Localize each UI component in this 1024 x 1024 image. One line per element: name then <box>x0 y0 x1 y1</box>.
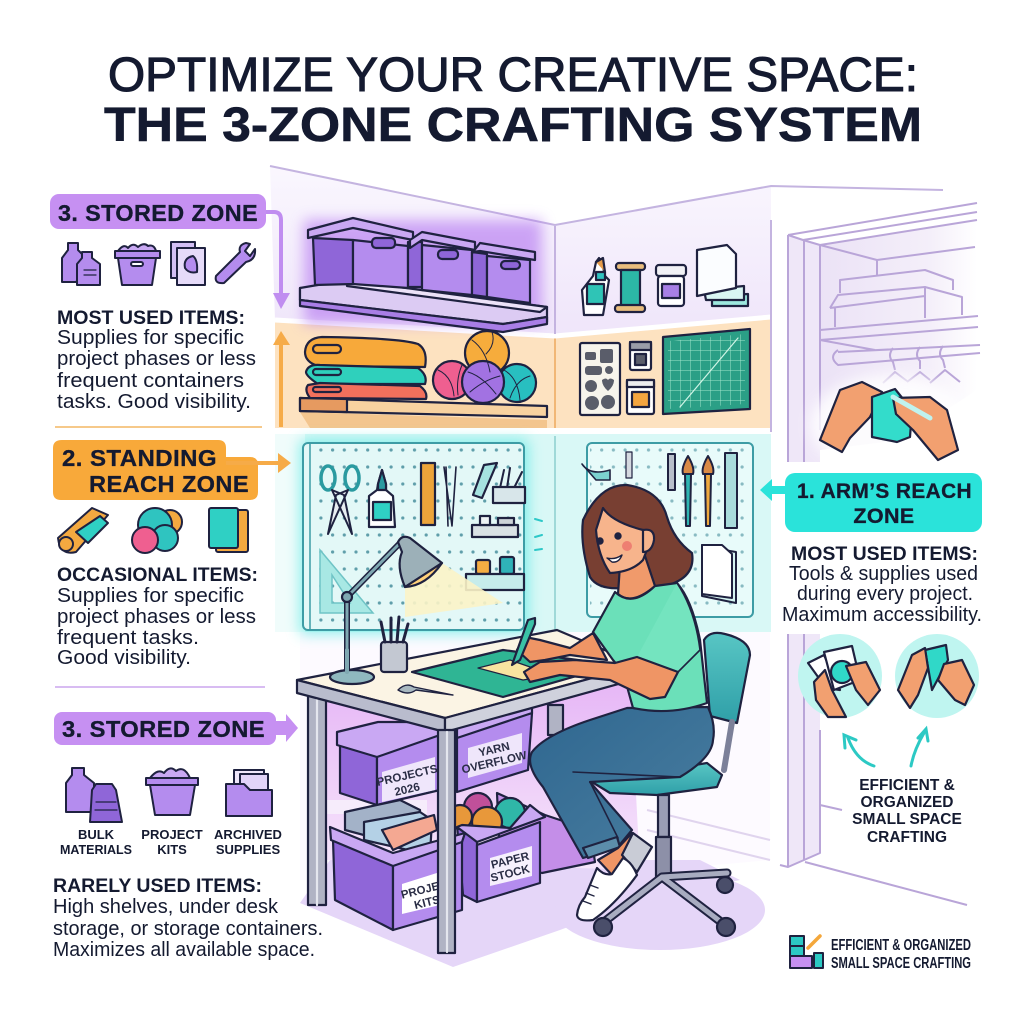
text: efficient and organized <box>852 777 962 846</box>
arrows: up to circles <box>844 729 928 766</box>
text: most used items top <box>57 308 256 413</box>
yarn overflow box <box>457 713 532 792</box>
chair <box>592 633 750 936</box>
text: occasional items: OCCASIONAL ITEMS: <box>57 565 258 586</box>
glue bottle <box>369 470 395 527</box>
closet <box>776 203 990 905</box>
title: OPTIMIZE YOUR CREATIVE SPACE: <box>108 49 918 102</box>
torso <box>593 583 707 711</box>
face <box>596 508 652 573</box>
front shoe <box>577 858 637 920</box>
arrow: to pegboard <box>226 453 291 473</box>
icon captions: MATERIALS <box>60 842 132 857</box>
text: occasional items <box>57 565 258 669</box>
upper wall supplies: glue, thread, jar, paper <box>582 245 748 315</box>
shelf <box>300 280 547 332</box>
text: most used items right <box>782 544 982 626</box>
text: most used items top: Supplies for specific <box>57 327 244 349</box>
under desk storage: OVERFLOW <box>461 750 528 776</box>
icon captions: KITS <box>157 842 187 857</box>
text: most used items top: MOST USED ITEMS: <box>57 308 245 329</box>
text: rarely used items: storage, or storage containers. <box>53 918 323 940</box>
under desk storage: PAPER <box>490 850 531 872</box>
label: 3 stored zone lower: 3. STORED ZONE <box>62 716 265 742</box>
wall panel: stencils and cutting mat <box>580 329 750 415</box>
box 1 <box>308 218 413 288</box>
icons: hands circles <box>798 634 979 718</box>
label: 2 standing reach zone: REACH ZONE <box>89 471 249 497</box>
text: occasional items: Good visibility. <box>57 647 191 669</box>
under desk storage: STOCK <box>489 863 532 885</box>
icon captions: ARCHIVED <box>214 827 282 842</box>
footer logo <box>790 936 971 972</box>
desk lamp <box>330 537 503 684</box>
text: most used items top: tasks. Good visibility. <box>57 391 251 413</box>
label: 2 standing reach zone <box>53 440 258 500</box>
text: efficient and organized: SMALL SPACE <box>852 811 962 828</box>
legs <box>530 707 714 858</box>
dividers <box>55 686 265 688</box>
box 3 <box>472 243 535 303</box>
set square <box>320 550 373 613</box>
under desk storage: PROJE <box>400 880 441 902</box>
room background <box>270 166 943 967</box>
project kits box <box>345 800 420 850</box>
icon: hands with fabric <box>810 375 970 475</box>
text: most used items right: Maximum accessibility. <box>782 604 982 626</box>
band: standing reach zone <box>275 317 771 428</box>
text: occasional items: frequent tasks. <box>57 627 199 649</box>
label: 3 stored zone top <box>50 194 266 229</box>
label: 2 standing reach zone: 2. STANDING <box>62 445 217 471</box>
arrow: to right pegboard <box>760 479 785 501</box>
text: rarely used items: High shelves, under desk <box>53 896 279 918</box>
tools <box>444 463 525 590</box>
icon captions: SUPPLIES <box>216 842 280 857</box>
text: occasional items: Supplies for specific <box>57 585 244 607</box>
text: rarely used items <box>53 876 323 961</box>
text: most used items top: frequent containers <box>57 370 244 392</box>
title: THE 3-ZONE CRAFTING SYSTEM <box>104 98 922 152</box>
text: efficient and organized: CRAFTING <box>867 829 947 846</box>
text: most used items right: Tools & supplies used <box>789 563 978 585</box>
person <box>512 485 714 920</box>
under desk background <box>327 680 640 870</box>
under desk storage: PROJECTS <box>376 763 439 789</box>
box 2 <box>408 232 475 295</box>
near arm <box>524 657 678 699</box>
pegboard left <box>300 440 542 634</box>
upper shelf with stored boxes <box>300 218 547 332</box>
text: efficient and organized: ORGANIZED <box>860 794 954 811</box>
icons: stored zone <box>62 242 255 285</box>
scissors <box>321 466 359 534</box>
back forearm <box>517 633 607 662</box>
arrow: down to shelf <box>266 212 290 309</box>
text: rarely used items: RARELY USED ITEMS: <box>53 876 262 897</box>
icon captions: BULK <box>78 827 115 842</box>
title <box>104 49 922 152</box>
label: 1 arm's reach zone: 1. ARM’S REACH <box>797 479 972 503</box>
text: most used items right: during every project. <box>797 583 973 605</box>
desk <box>297 617 640 953</box>
label: 1 arm's reach zone <box>785 473 982 532</box>
label: 1 arm's reach zone: ZONE <box>853 504 915 528</box>
under desk storage: 2026 <box>394 781 421 799</box>
desk back legs <box>308 692 563 905</box>
footer logo: EFFICIENT & ORGANIZED <box>831 937 971 954</box>
ankle <box>598 833 640 875</box>
label: 3 stored zone top: 3. STORED ZONE <box>58 200 258 226</box>
neck <box>618 556 655 598</box>
text: most used items right: MOST USED ITEMS: <box>791 544 978 565</box>
icon captions <box>60 827 282 857</box>
pencil <box>512 618 535 665</box>
text: efficient and organized: EFFICIENT & <box>859 777 955 794</box>
arrow: up to middle shelf <box>273 331 290 427</box>
text: most used items top: project phases or less <box>57 348 256 370</box>
band: arm's reach zone <box>275 220 771 632</box>
under desk storage: YARN <box>478 741 511 759</box>
labels <box>382 757 435 802</box>
text: occasional items: project phases or less <box>57 606 256 628</box>
footer logo: SMALL SPACE CRAFTING <box>831 955 971 972</box>
paper stock box <box>457 825 477 902</box>
under desk storage <box>330 706 595 930</box>
text: rarely used items: Maximizes all available space. <box>53 939 315 961</box>
under desk storage: KITS <box>413 894 442 912</box>
back shoe <box>622 833 652 872</box>
icons: standing zone <box>58 508 248 553</box>
arrow: to under desk <box>276 714 298 742</box>
hair <box>582 485 692 592</box>
projects box <box>340 743 377 805</box>
icon captions: PROJECT <box>141 827 203 842</box>
icons: lower stored zone <box>66 768 272 822</box>
ruler <box>421 463 435 525</box>
back box <box>497 793 595 873</box>
middle shelf: fabric and yarn <box>300 331 547 428</box>
motion dashes <box>535 519 542 550</box>
pegboard right <box>582 443 753 617</box>
